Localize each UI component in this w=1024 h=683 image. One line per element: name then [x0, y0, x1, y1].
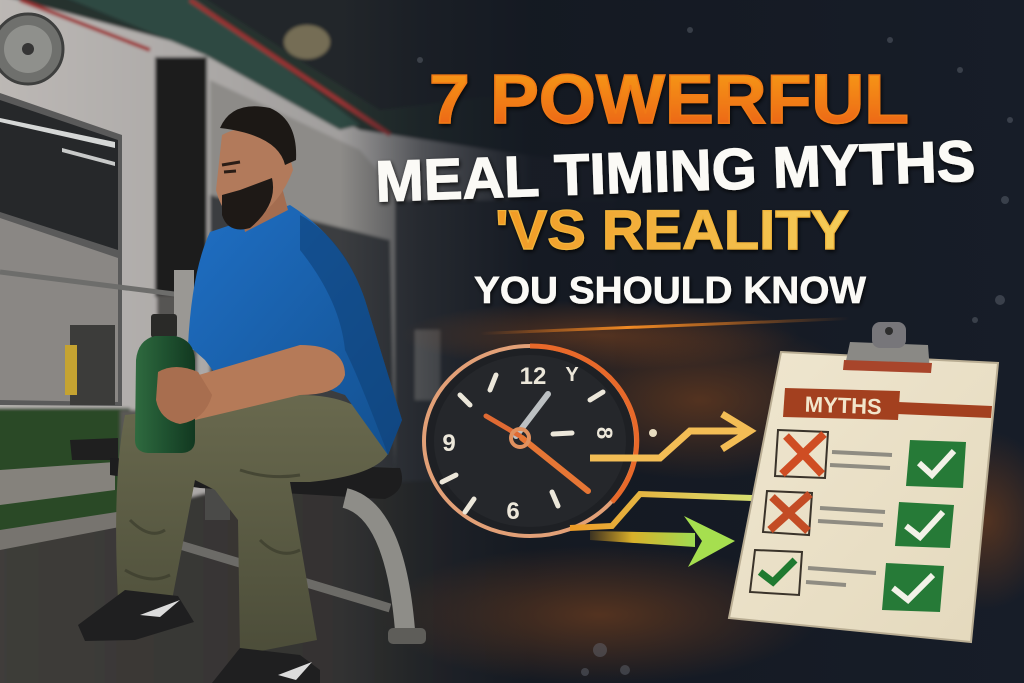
hair [220, 106, 296, 165]
right dark panel [340, 0, 1024, 683]
myths label [783, 388, 992, 420]
title line: 7 powerful: 7 POWERFUL [429, 60, 909, 138]
fist [155, 368, 212, 424]
man [78, 106, 402, 683]
row 2: x [763, 491, 954, 548]
clock numerals: 8 [592, 427, 617, 439]
pants folds [125, 470, 300, 579]
arrow: green reality [590, 516, 735, 567]
clipboard [729, 322, 998, 642]
clock [424, 346, 637, 536]
clock numerals [442, 363, 617, 525]
weight bench [70, 438, 426, 644]
row 1: x [775, 430, 966, 488]
clock numerals: Y [565, 364, 579, 386]
bokeh specks [417, 27, 1013, 676]
eye and brow [222, 162, 240, 172]
clock numerals: 9 [442, 430, 456, 457]
title line: vs reality: 'VS REALITY [495, 198, 849, 261]
rust texture patches [380, 300, 1024, 683]
mirror [0, 93, 122, 406]
barbell and bench rails [0, 270, 230, 550]
water bottle [135, 314, 212, 453]
forearm [165, 345, 345, 420]
title line: you should know: YOU SHOULD KNOW [474, 270, 866, 312]
clock numerals: 12 [520, 363, 546, 390]
shirt shadow [300, 215, 402, 455]
clock hands [516, 394, 548, 436]
clock numerals: 6 [506, 498, 520, 525]
title line: meal timing myths: MEAL TIMING MYTHS [374, 129, 976, 214]
myths label: MYTHS [804, 392, 882, 419]
title [374, 60, 976, 312]
clipboard paper [729, 352, 998, 642]
wall fan [0, 14, 63, 84]
pants: legs [116, 395, 390, 655]
shirt [188, 205, 402, 455]
arrow: middle [570, 494, 752, 528]
arrow: top myth [590, 414, 750, 458]
beard [222, 178, 273, 229]
row 3: check [750, 550, 944, 612]
divider glow line [480, 317, 850, 335]
shoes [78, 590, 194, 641]
neck [238, 180, 288, 232]
face [216, 128, 293, 222]
clipboard clip [843, 322, 932, 373]
clock ticks [442, 375, 603, 512]
